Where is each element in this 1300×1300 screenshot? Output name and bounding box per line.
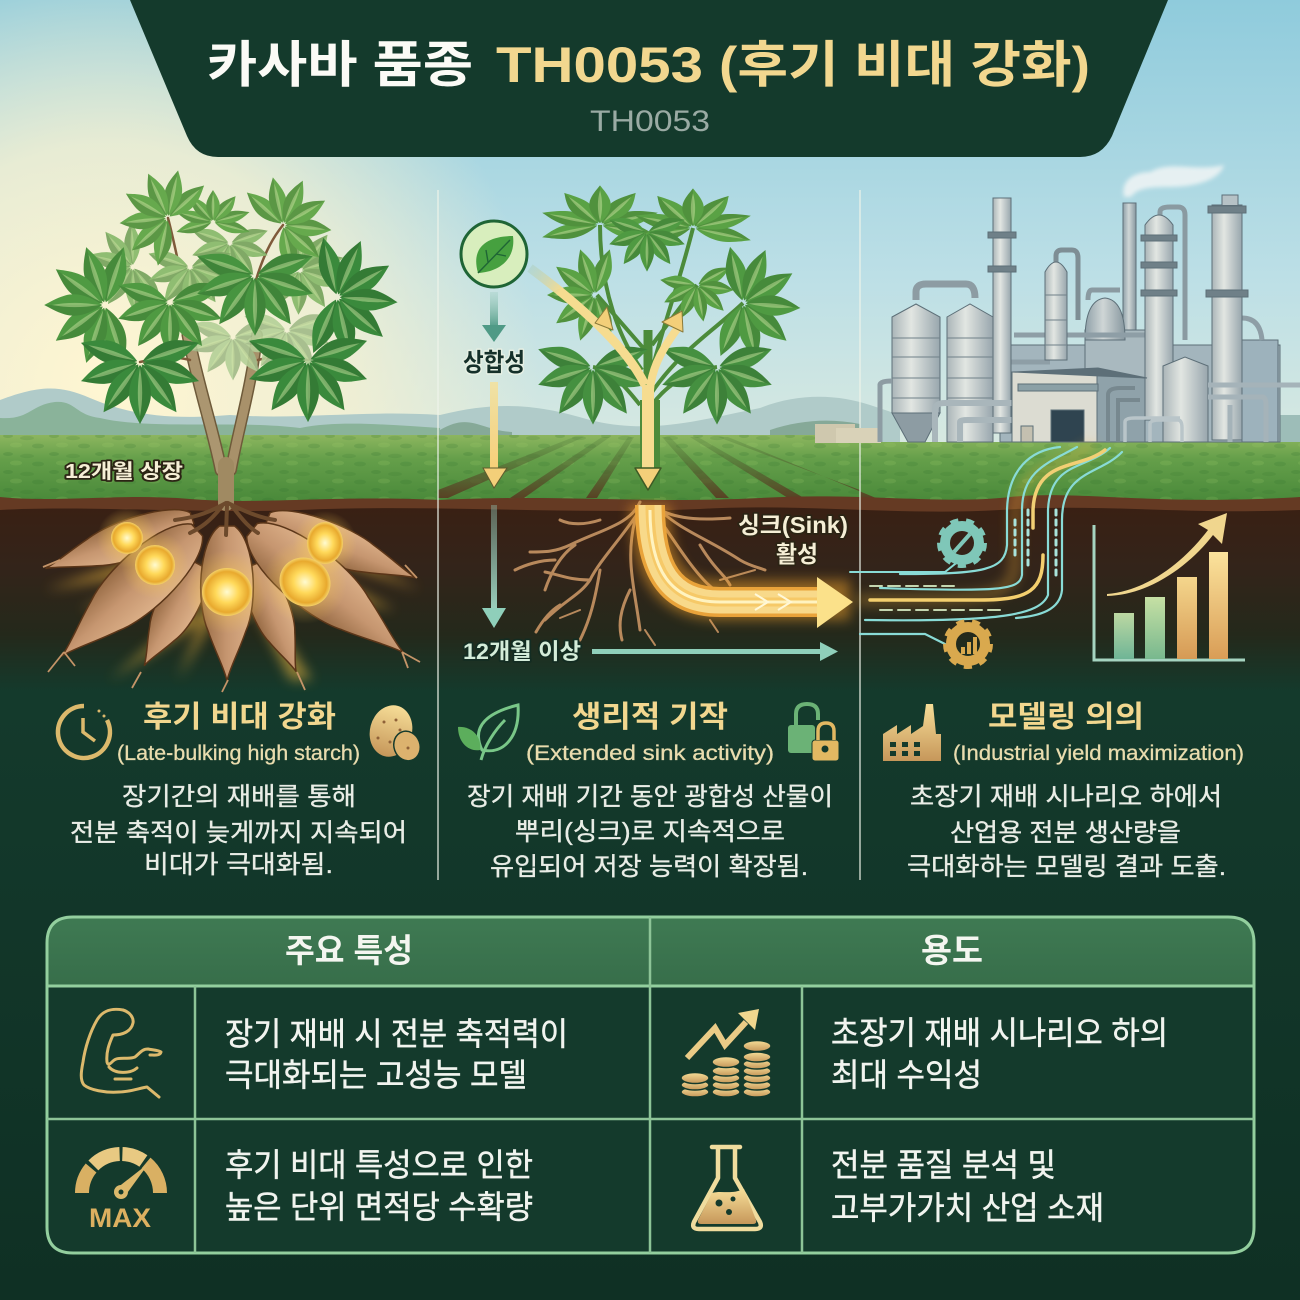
bar chart xyxy=(1094,513,1245,660)
subheading: (Late-bulking high starch) xyxy=(117,742,360,765)
heading: 후기 비대 강화 xyxy=(143,701,336,734)
glow rays xyxy=(45,545,420,680)
icon: MAX gauge xyxy=(82,1154,160,1233)
body text: 산업용 전분 생산량을 xyxy=(950,819,1181,847)
body text: 극대화하는 모델링 결과 도출. xyxy=(907,853,1226,881)
cell text: 최대 수익성 xyxy=(831,1057,982,1093)
cell text xyxy=(831,1015,1168,1093)
gear: teal xyxy=(940,520,984,566)
icon: clock xyxy=(58,706,110,758)
label: sink activity: 싱크(Sink) xyxy=(738,512,848,538)
cell text: 극대화되는 고성능 모델 xyxy=(225,1057,527,1093)
body text: 유입되어 저장 능력이 확장됨. xyxy=(490,853,808,881)
tuber rootlets xyxy=(43,560,420,692)
cell text xyxy=(225,1016,568,1093)
title text: TH0053 xyxy=(496,37,703,93)
body text: 초장기 재배 시나리오 하에서 xyxy=(910,783,1222,811)
body text: 비대가 극대화됨. xyxy=(144,851,333,879)
smoke xyxy=(1123,165,1224,197)
section: mechanism text xyxy=(458,701,839,881)
title text xyxy=(207,37,1090,93)
section: modeling text xyxy=(883,701,1244,881)
arrow: gold xyxy=(483,382,507,488)
background: mountains and tree line xyxy=(0,388,1300,442)
subheading: (Extended sink activity) xyxy=(526,742,774,765)
icon: lock xyxy=(788,704,839,761)
label: sink activity: 활성 xyxy=(776,541,818,567)
factory xyxy=(880,195,1300,442)
icon: muscle arm xyxy=(81,1009,161,1097)
data stream xyxy=(850,447,1122,644)
table xyxy=(47,917,1254,1253)
body text: 장기간의 재배를 통해 xyxy=(122,783,356,811)
panel: industrial modeling xyxy=(815,165,1300,666)
label: 12 months: 12개월 상장 xyxy=(65,460,183,483)
body text xyxy=(70,783,407,879)
icon: potato xyxy=(364,700,424,765)
gear: gold xyxy=(946,622,990,666)
yellow flow arrows xyxy=(530,268,683,490)
roots xyxy=(515,502,765,645)
panel dividers xyxy=(438,190,860,880)
starch glow spots xyxy=(97,508,357,634)
small warehouse xyxy=(815,424,881,443)
middle field rows xyxy=(438,437,876,498)
body text: 뿌리(싱크)로 지속적으로 xyxy=(515,818,785,846)
label: over 12 months: 12개월 이상 xyxy=(463,639,581,664)
golden sink arrow xyxy=(650,505,853,628)
body text xyxy=(907,783,1226,881)
field xyxy=(0,435,1300,503)
icon: factory xyxy=(883,704,941,761)
arrow: teal right xyxy=(592,642,838,661)
subheading: (Industrial yield maximization) xyxy=(953,742,1244,765)
icon: MAX gauge: MAX xyxy=(89,1203,151,1233)
panel: physiological mechanism plant xyxy=(461,185,853,664)
arrow: teal down xyxy=(482,505,506,628)
title text: 카사바 품종 xyxy=(207,37,473,93)
panel: late bulking plant xyxy=(39,151,424,692)
subtitle: TH0053 xyxy=(590,105,710,138)
icon: sprout leaves xyxy=(458,705,518,760)
tubers xyxy=(39,499,424,681)
arrow: teal to compatibility xyxy=(482,292,506,342)
body text xyxy=(467,783,833,881)
body text: 장기 재배 기간 동안 광합성 산물이 xyxy=(467,783,833,811)
cell text: 전분 품질 분석 및 xyxy=(831,1147,1056,1183)
section: late bulking text xyxy=(58,700,424,879)
cell text: 장기 재배 시 전분 축적력이 xyxy=(225,1016,568,1052)
heading: 모델링 의의 xyxy=(988,701,1144,734)
table header: key traits: 주요 특성 xyxy=(285,932,413,969)
leaves xyxy=(44,151,403,424)
cell text xyxy=(831,1147,1104,1226)
background: sky xyxy=(0,0,1300,500)
stems xyxy=(593,225,743,498)
soil xyxy=(0,495,1300,692)
table header: uses: 용도 xyxy=(921,932,983,969)
cell text xyxy=(225,1147,533,1225)
title banner xyxy=(130,0,1168,157)
leaves xyxy=(535,185,805,425)
label: sink activity xyxy=(738,512,848,567)
cell text: 후기 비대 특성으로 인한 xyxy=(225,1147,533,1183)
lower dark background xyxy=(0,690,1300,1300)
label: compatibility: 상합성 xyxy=(463,349,525,377)
icon: flask xyxy=(693,1147,761,1229)
title text: (후기 비대 강화) xyxy=(719,37,1090,93)
trunks xyxy=(140,218,308,535)
cell text: 고부가가치 산업 소재 xyxy=(831,1190,1104,1226)
icon: coins and chart arrow xyxy=(681,1009,771,1097)
heading: 생리적 기작 xyxy=(572,701,728,734)
cell text: 초장기 재배 시나리오 하의 xyxy=(831,1015,1168,1051)
leaf badge xyxy=(461,221,527,287)
body text: 전분 축적이 늦게까지 지속되어 xyxy=(70,819,407,847)
cell text: 높은 단위 면적당 수확량 xyxy=(225,1189,533,1225)
